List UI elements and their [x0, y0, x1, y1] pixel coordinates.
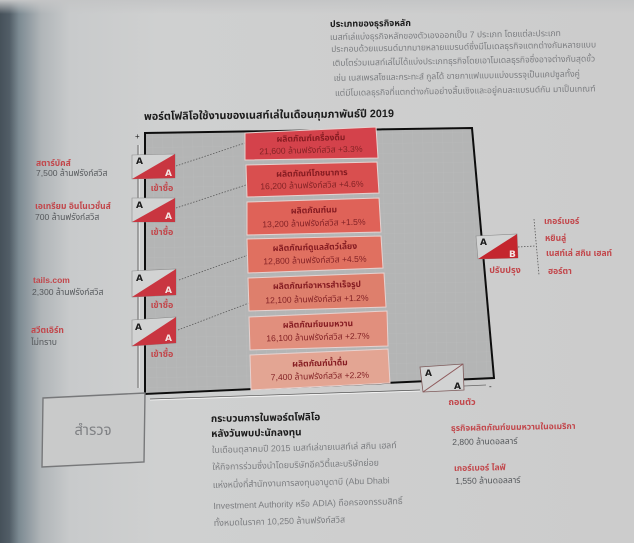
- panel: survey box: สำรวจ: [74, 422, 112, 439]
- acquisition icon: Starbucks: [132, 154, 175, 179]
- divestment icon: A: [425, 369, 432, 379]
- bar: prepared food: ผลิตภัณฑ์อาหารสำเร็จรูป: [273, 279, 361, 291]
- bar: water: ผลิตภัณฑ์น้ำดื่ม: [292, 356, 348, 369]
- text block: portfolio process: [212, 440, 403, 528]
- label: tails.com: [32, 275, 104, 297]
- improved brands list: เนสท์เล่ สกิน เฮลท์: [546, 247, 612, 258]
- bar: prepared food: 12,100 ล้านฟรังก์สวิส +1.2%: [265, 293, 369, 305]
- divestment icon: A: [454, 382, 461, 392]
- heading: portfolio process: หลังวันพบปะนักลงทุน: [211, 426, 302, 440]
- bar: nutrition: ผลิตภัณฑ์โภชนาการ: [276, 167, 348, 179]
- acquisition icon: Aimmune: [132, 198, 175, 222]
- label: tails.com: tails.com: [33, 275, 70, 285]
- label: Starbucks: สตาร์บัคส์: [36, 158, 71, 168]
- callout: US confectionery business: ธุรกิจผลิตภัณฑ์ขนมหวานในอเมริกา: [451, 421, 576, 433]
- callout: US confectionery business: [451, 421, 576, 447]
- heading: portfolio process: กระบวนการในพอร์ตโฟลิโอ: [211, 411, 320, 425]
- label: Sweet Earth: สวีตเอิร์ท: [31, 325, 64, 335]
- heading: portfolio process: [211, 411, 321, 440]
- acquisition icon: Sweet Earth: A: [135, 323, 142, 333]
- bar: dairy: ผลิตภัณฑ์นม: [291, 204, 337, 216]
- acquisition icon: tails.com: [132, 269, 176, 297]
- bar: beverages: [245, 127, 378, 160]
- bar: dairy: [247, 198, 381, 235]
- panel: survey box: [42, 393, 145, 467]
- label: Aimmune: 700 ล้านฟรังก์สวิส: [35, 212, 99, 222]
- callout: Gerber Life: [454, 462, 521, 486]
- label: Sweet Earth: ไม่ทราบ: [30, 337, 57, 347]
- acquisition icon: tails.com: A: [165, 286, 172, 296]
- acquisition label: เข้าซื้อ: [151, 181, 173, 193]
- acquisition icon: Aimmune: A: [136, 201, 143, 211]
- callout: US confectionery business: 2,800 ล้านดอลลาร์: [452, 436, 518, 447]
- bar: pet care: ผลิตภัณฑ์ดูแลสัตว์เลี้ยง: [273, 240, 357, 253]
- text block: portfolio process: ให้กิจการร่วมซึ่งนำโดยบริษัทอีควิตี้และบริษัทย่อย: [212, 457, 379, 472]
- improved brands list: เกอร์เบอร์: [544, 216, 580, 226]
- acquisition label: เข้าซื้อ: [151, 225, 173, 237]
- vertical axis: +: [135, 132, 140, 141]
- acquisition icon: Starbucks: A: [165, 169, 172, 179]
- improved brands list: [544, 216, 612, 276]
- acquisition icon: Starbucks: A: [136, 157, 143, 167]
- divestment icon: [420, 364, 464, 392]
- divestment label: ถอนตัว: [448, 397, 476, 407]
- bar: beverages: ผลิตภัณฑ์เครื่องดื่ม: [276, 131, 345, 144]
- text block: main business types: เนสท์เล่แบ่งธุรกิจหลักของตัวเองออกเป็น 7 ประเภท โดยแต่ละประเภท: [330, 28, 561, 42]
- improvement icon: B: [509, 250, 516, 260]
- horizontal axis: -: [489, 382, 492, 391]
- acquisition label: เข้าซื้อ: [151, 298, 173, 310]
- improvement icon: [476, 234, 518, 260]
- acquisition icon: Sweet Earth: A: [165, 334, 172, 344]
- bar: confectionery: 16,100 ล้านฟรังก์สวิส +2.7%: [266, 331, 370, 343]
- bar: confectionery: [249, 311, 388, 350]
- text block: main business types: เช่น เนสเพรสโซและกระทะส์ กูลโด้ ขายกาแฟแบบแบ่งบรรจุเป็นแคปซูลทั้งคู่: [334, 68, 580, 84]
- text block: portfolio process: Investment Authority หรือ ADIA) ถือครองกรรมสิทธิ์: [213, 496, 403, 511]
- improvement label: ปรับปรุง: [489, 265, 521, 275]
- improvement icon: A: [480, 238, 487, 248]
- bar: pet care: [247, 236, 383, 273]
- dotted connector lines: [176, 143, 539, 330]
- horizontal axis: [150, 382, 492, 400]
- title: พอร์ตโฟลิโอใช้งานของเนสท์เล่ในเดือนกุมภาพันธ์ปี 2019: [144, 107, 394, 123]
- bar: confectionery: ผลิตภัณฑ์ขนมหวาน: [283, 318, 353, 330]
- text block: portfolio process: ทั้งหมดในราคา 10,250 ล้านฟรังก์สวิส: [214, 514, 345, 528]
- label: Starbucks: 7,500 ล้านฟรังก์สวิส: [36, 168, 108, 178]
- bar: beverages: 21,600 ล้านฟรังก์สวิส +3.3%: [259, 144, 363, 156]
- improved brands list: หยินลู่: [545, 232, 566, 243]
- bar: prepared food: [248, 273, 386, 311]
- label: tails.com: 2,300 ล้านฟรังก์สวิส: [32, 287, 104, 297]
- label: Sweet Earth: [30, 325, 64, 347]
- bar: pet care: 12,800 ล้านฟรังก์สวิส +4.5%: [263, 254, 367, 266]
- bar: water: 7,400 ล้านฟรังก์สวิส +2.2%: [271, 370, 370, 382]
- acquisition icon: Aimmune: A: [165, 212, 172, 222]
- label: Aimmune: [35, 200, 111, 222]
- callout: Gerber Life: 1,550 ล้านดอลลาร์: [455, 475, 521, 486]
- improved brands list: ฮอร์ตา: [548, 266, 572, 276]
- label: Starbucks: [36, 158, 108, 178]
- text block: main business types: [330, 27, 597, 99]
- text block: main business types: เติบโตร่วมเนสท์เล่ไม่ได้แบ่งประเภทธุรกิจโดยเอาโมเดลธุรกิจซึ่งอาจต่างกันสุดขั้ว: [332, 52, 595, 68]
- bar: water: [250, 349, 390, 390]
- heading: main business types: ประเภทของธุรกิจหลัก: [330, 18, 411, 29]
- text block: main business types: ประกอบด้วยแบรนด์มากมายหลายแบรนด์ซึ่งมีโมเดลธุรกิจแตกต่างกันหลายแบบ: [331, 38, 596, 54]
- bar: nutrition: 16,200 ล้านฟรังก์สวิส +4.6%: [260, 179, 364, 191]
- text block: main business types: แต่มีโมเดลธุรกิจที่แตกต่างกันอย่างสิ้นเชิงและอยู่คนละแบรนด์กัน มาเป็นเกณฑ์: [335, 82, 596, 99]
- acquisition label: เข้าซื้อ: [151, 347, 173, 359]
- text block: portfolio process: แห่งหนึ่งที่สำนักงานการลงทุนอาบูดาบี (Abu Dhabi: [213, 474, 390, 491]
- callout: Gerber Life: เกอร์เบอร์ ไลฟ์: [454, 462, 507, 473]
- portfolio grid panel: [145, 128, 494, 394]
- bar: dairy: 13,200 ล้านฟรังก์สวิส +1.5%: [262, 217, 366, 229]
- label: Aimmune: เอเทรียม อินโนเวชั่นส์: [35, 200, 111, 211]
- text block: portfolio process: ในเดือนตุลาคมปี 2015 เนสท์เล่ขายเนสท์เล่ สกิน เฮลท์: [212, 440, 397, 455]
- acquisition icon: Sweet Earth: [132, 317, 176, 346]
- acquisition icon: tails.com: A: [136, 274, 143, 284]
- bar: nutrition: [246, 162, 379, 197]
